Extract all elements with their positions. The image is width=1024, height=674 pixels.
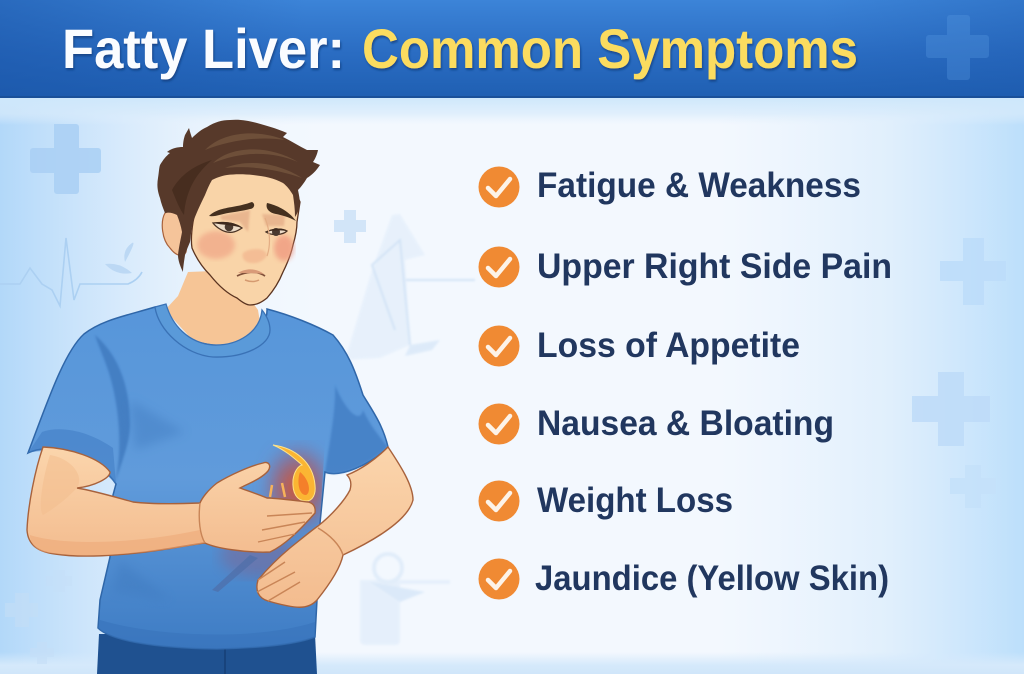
eye shadows (220, 210, 285, 232)
item: upper right side pain: Upper Right Side Pain (537, 247, 892, 286)
icon: faint crosses bottom left (5, 570, 72, 664)
background medical watermarks (0, 124, 1006, 664)
icon: faint clipboard (360, 554, 450, 645)
mouth (237, 272, 265, 276)
collar (155, 304, 270, 357)
title (62, 17, 858, 80)
cheeks (197, 231, 235, 259)
pain glow (212, 442, 324, 592)
hair (157, 120, 320, 272)
person illustration (27, 120, 413, 674)
left arm and hand (27, 447, 315, 556)
pants (97, 634, 317, 674)
item: nausea and bloating: Nausea & Bloating (537, 404, 834, 443)
symptom list (478, 166, 892, 600)
icon: cross right upper (940, 238, 1006, 305)
icon: heartbeat line (0, 238, 142, 306)
eyebrows (209, 202, 254, 216)
item: jaundice: Jaundice (Yellow Skin) (535, 559, 889, 598)
flame (270, 445, 315, 501)
icon: faint leaves (105, 243, 133, 274)
title: Common Symptoms (362, 17, 858, 80)
item: weight loss: Weight Loss (537, 481, 733, 520)
face (191, 165, 300, 305)
icon: cross right middle (912, 372, 990, 446)
ear (162, 211, 190, 255)
title: Fatty Liver: (62, 17, 345, 80)
icon: cross top left (30, 124, 101, 194)
nose (243, 249, 267, 263)
shirt shading (28, 335, 388, 649)
icon: header cross (926, 15, 989, 80)
icon: cross right lower (950, 465, 996, 508)
neck (165, 270, 262, 352)
header banner (0, 0, 1024, 98)
t-shirt (28, 307, 388, 649)
right arm and hand (257, 447, 413, 607)
icon: small cross center (334, 210, 366, 243)
eyes (213, 223, 242, 232)
item: fatigue: Fatigue & Weakness (537, 166, 861, 205)
item: loss of appetite: Loss of Appetite (537, 326, 800, 365)
icon: faint lungs (345, 214, 475, 360)
